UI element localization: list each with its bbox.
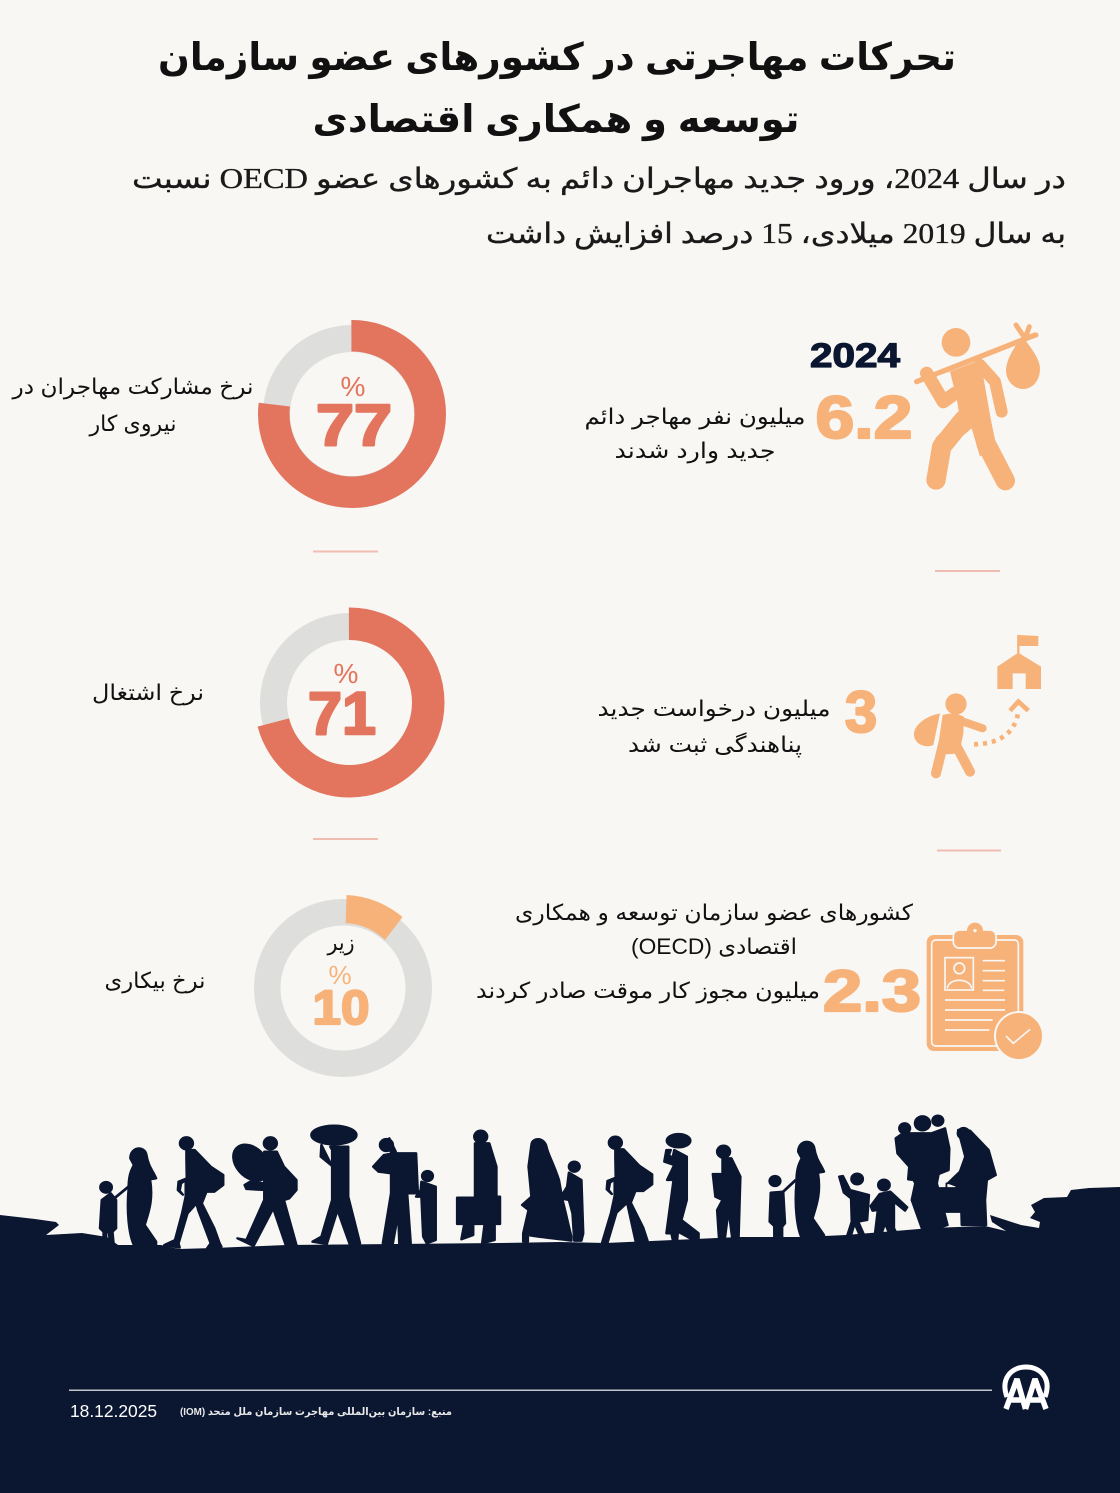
logo: AA (1005, 1367, 1047, 1409)
child holding hand (100, 1182, 129, 1244)
man with backpack (164, 1137, 223, 1248)
subtitle: به سال 2019 میلادی، 15 درصد افزایش داشت (486, 219, 1066, 250)
woman in long dress (522, 1139, 571, 1242)
donut chart: unemployment 10%: 10 (312, 982, 370, 1035)
stat: new permanent migrants: میلیون نفر مهاجر دائم (584, 404, 806, 430)
stat: asylum applications: میلیون درخواست جدید (598, 696, 830, 721)
donut chart: unemployment 10%: زیر (327, 930, 354, 955)
donut chart: unemployment 10%: % (328, 960, 352, 990)
subtitle (132, 164, 1066, 250)
donut chart: labour force participation 77% (274, 336, 430, 492)
stat: new permanent migrants: جدید وارد شدند (614, 438, 776, 463)
child waving (839, 1174, 869, 1235)
label: labour force participation (11, 374, 253, 436)
man carrying large bag (226, 1137, 296, 1246)
stat: temporary work permits: اقتصادی (OECD) (631, 934, 797, 959)
stat: asylum applications: 3 (845, 680, 877, 745)
donut chart: employment 71% (271, 624, 428, 781)
title: توسعه و همکاری اقتصادی (312, 99, 800, 142)
woman carrying load on head (664, 1134, 699, 1240)
donut chart: labour force participation 77%: 77 (316, 393, 392, 458)
title: تحرکات مهاجرتی در کشورهای عضو سازمان (158, 37, 956, 79)
label: labour force participation: نرخ مشارکت مهاجران در (11, 374, 253, 399)
title (158, 37, 956, 142)
ground with footer band (0, 1187, 1120, 1493)
woman with briefcase (939, 1128, 996, 1225)
silhouettes: walking migrants, right half (560, 1116, 996, 1243)
donut chart: employment 71%: 71 (308, 680, 376, 747)
stat: asylum applications (598, 680, 877, 758)
woman with backpack (373, 1138, 418, 1243)
woman (796, 1142, 824, 1238)
man with suitcase (457, 1131, 500, 1243)
label: employment: نرخ اشتغال (92, 680, 204, 705)
stat: temporary work permits (476, 900, 921, 1024)
stat: asylum applications: پناهندگی ثبت شد (628, 732, 802, 758)
icon: clipboard with check (927, 923, 1043, 1060)
icon: migrant with bundle (917, 325, 1040, 481)
icon: asylum seeker walking to shelter (914, 635, 1041, 773)
stat: temporary work permits: کشورهای عضو سازمان توسعه و همکاری (515, 900, 914, 925)
label: unemployment: نرخ بیکاری (104, 968, 206, 993)
date: 18.12.2025 (70, 1401, 157, 1421)
man with backpack (602, 1137, 652, 1243)
stat: temporary work permits: میلیون مجوز کار موقت صادر کردند (476, 978, 820, 1003)
source: منبع: سازمان بین‌المللی مهاجرت سازمان ملل متحد (IOM) (180, 1406, 452, 1418)
donut chart: labour force participation 77%: % (341, 371, 365, 402)
footer rule (69, 1390, 992, 1391)
woman (128, 1148, 156, 1245)
father carrying children (896, 1116, 949, 1230)
man carrying load on head (311, 1126, 360, 1245)
label: labour force participation: نیروی کار (88, 411, 176, 436)
year label: 2024 (810, 337, 900, 375)
stat: new permanent migrants: 6.2 (816, 384, 912, 451)
child holding hand (770, 1176, 796, 1237)
donut chart: employment 71%: % (334, 658, 358, 689)
child (560, 1162, 583, 1241)
stat: new permanent migrants (584, 384, 912, 463)
donut chart: unemployment 10% (267, 895, 419, 1064)
silhouettes: walking migrants, left half (100, 1126, 571, 1248)
man with shoulder bag (713, 1146, 740, 1237)
subtitle: در سال 2024، ورود جدید مهاجران دائم به کشورهای عضو OECD نسبت (132, 164, 1066, 195)
child walking (871, 1180, 907, 1234)
child beside woman (416, 1171, 436, 1243)
stat: temporary work permits: 2.3 (823, 959, 921, 1024)
